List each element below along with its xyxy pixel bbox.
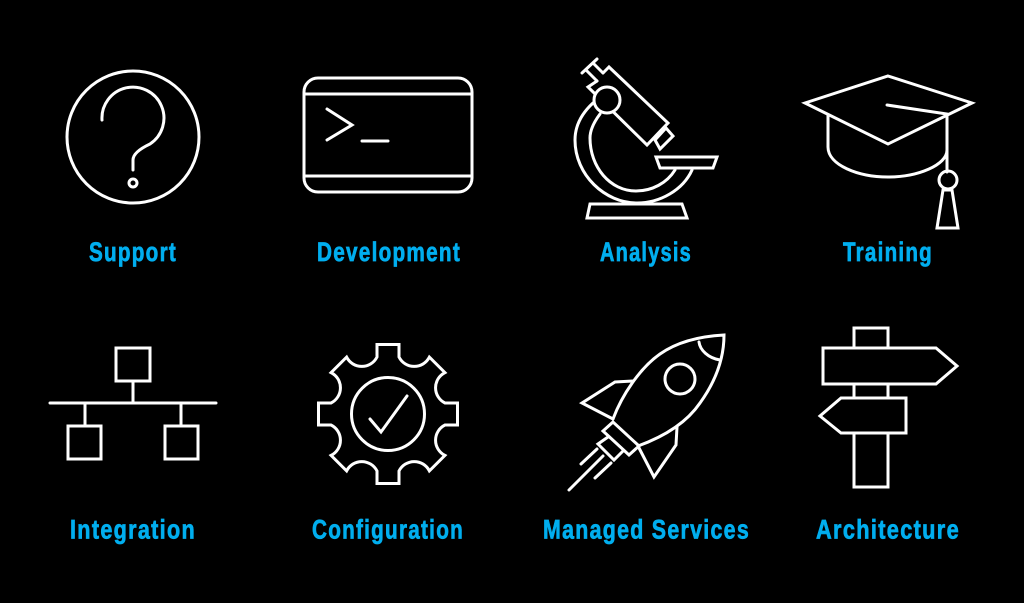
label: Configuration: Configuration [312,514,464,544]
label: Managed Services: Managed Services [543,514,750,544]
icon: rocket [569,335,724,490]
icon: microscope [575,59,717,218]
label: Support: Support [89,237,177,267]
icon: network hierarchy [50,348,216,459]
label: Analysis: Analysis [600,237,692,267]
icon: signpost [820,328,957,487]
icon: question mark in circle [67,71,199,203]
label: Architecture: Architecture [816,514,960,544]
label: Development: Development [317,237,461,267]
icon: graduation cap [805,76,972,228]
icon: gear with check mark [318,344,458,484]
label: Training: Training [843,237,933,267]
label: Integration: Integration [70,514,196,544]
icon: terminal window [304,78,472,192]
